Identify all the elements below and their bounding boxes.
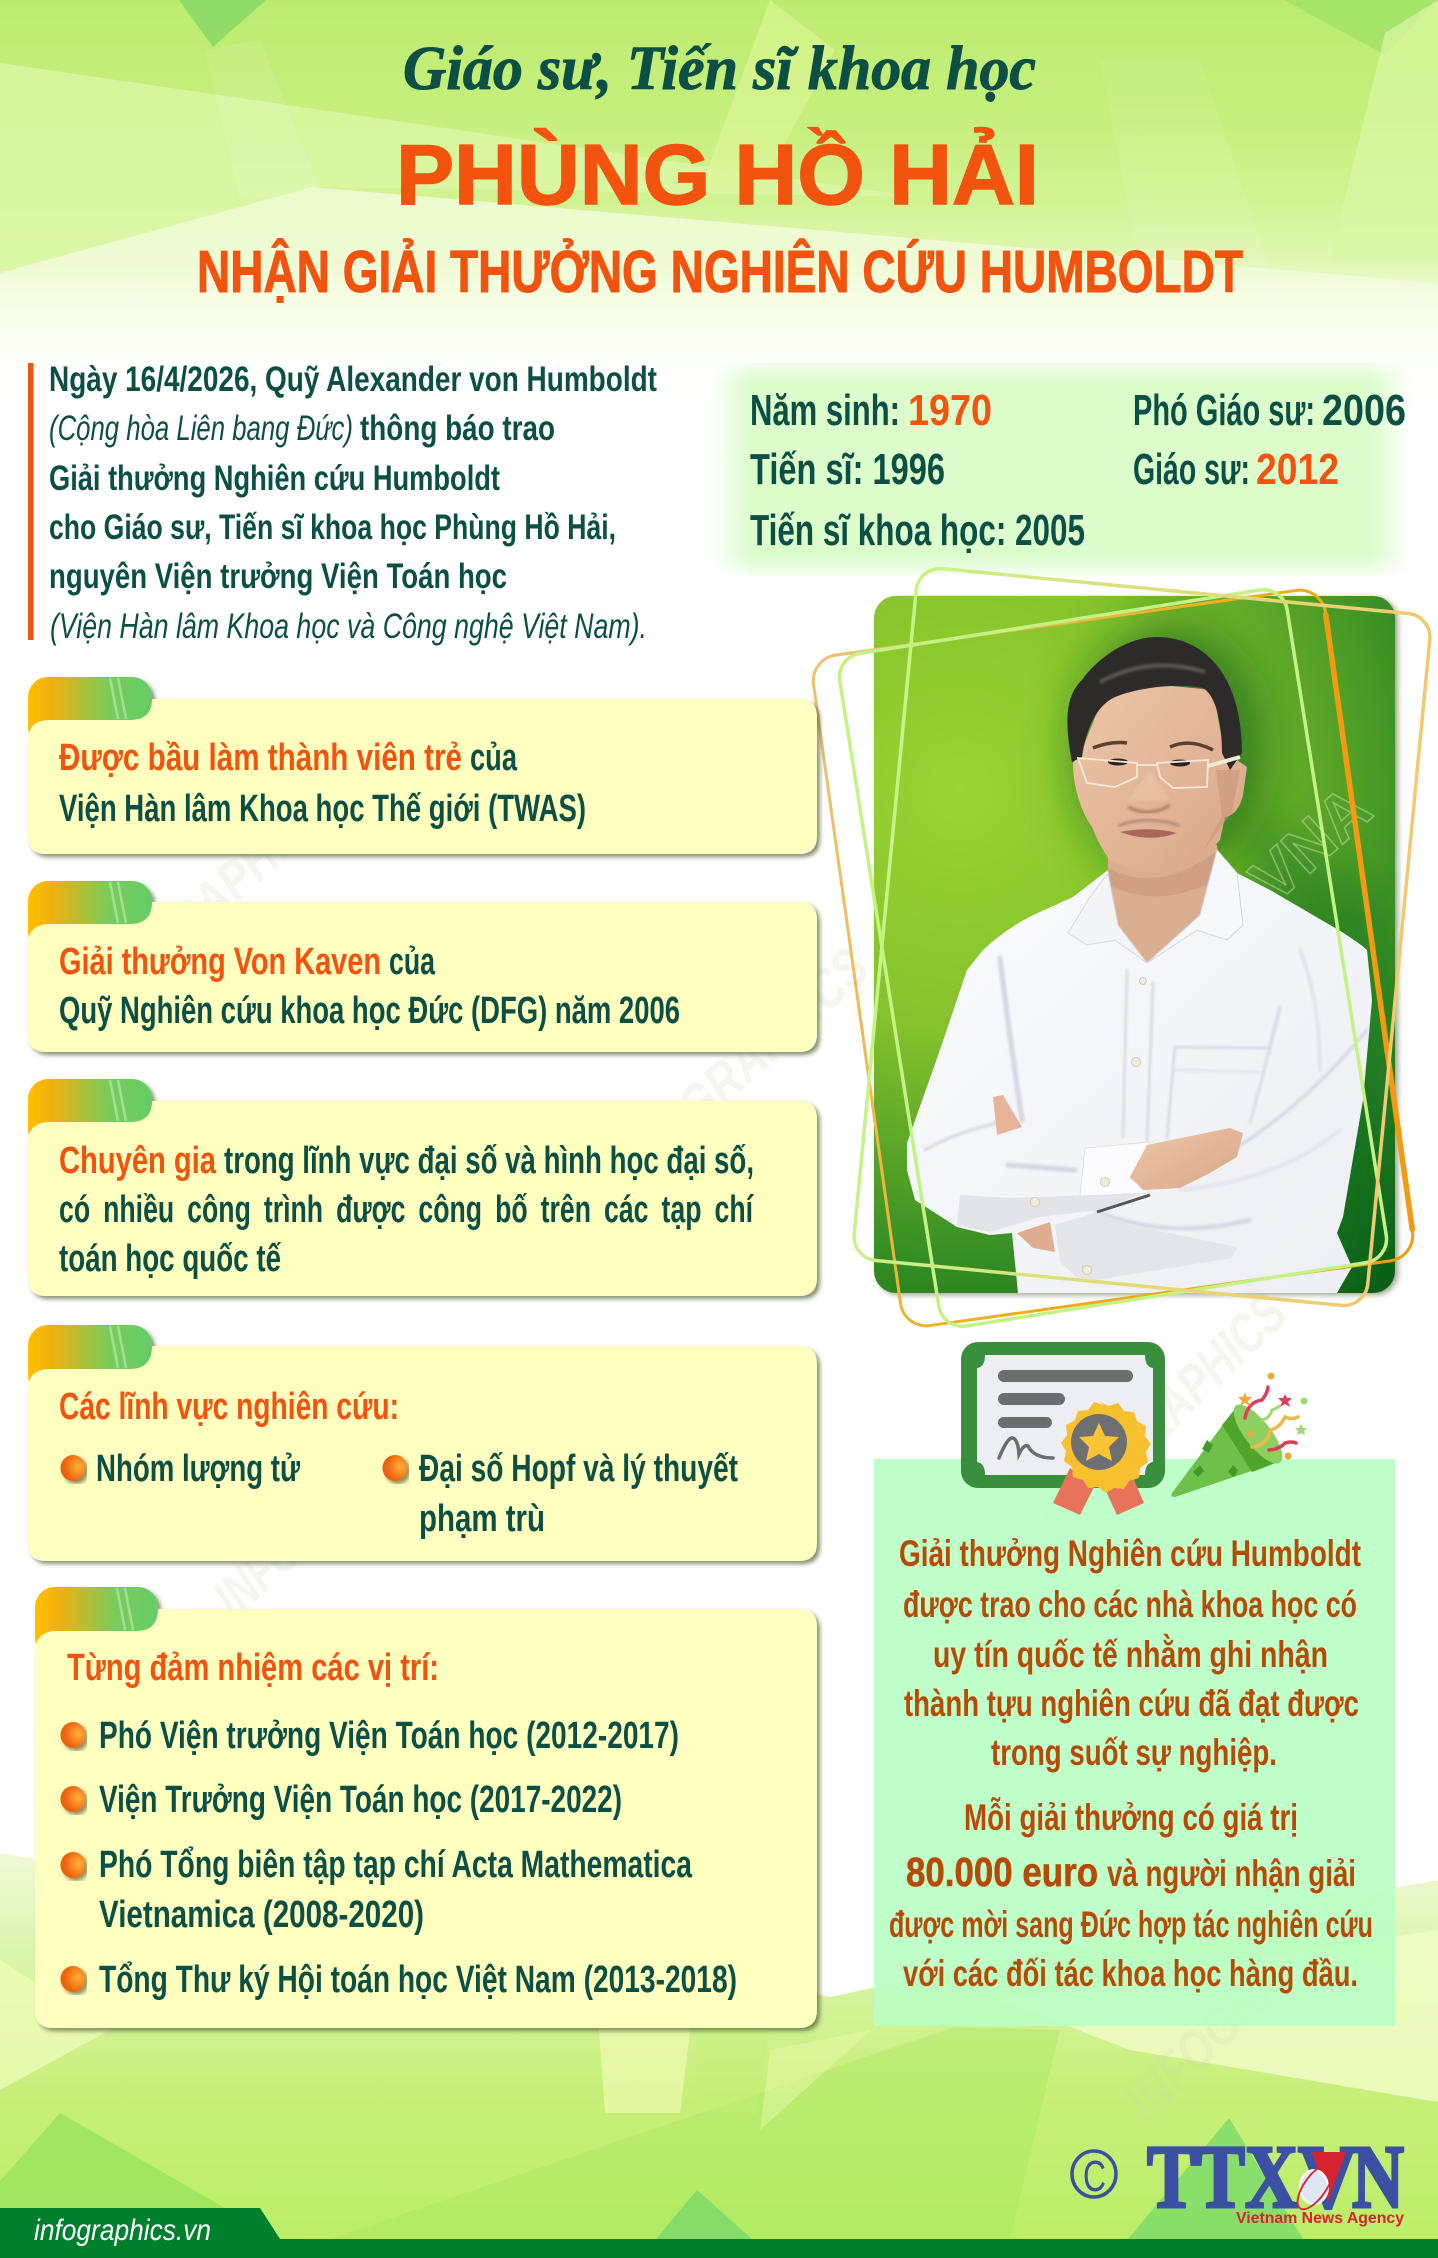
card: TWAS membership: Viện Hàn lâm Khoa học Thế giới (TWAS) — [59, 788, 586, 830]
upper hand — [993, 1095, 1022, 1135]
title line: name: PHÙNG HỒ HẢI — [396, 127, 1039, 223]
card: algebra expert: Chuyên gia — [59, 1140, 217, 1182]
info panel: milestones: 2012 — [1256, 445, 1339, 494]
card: TWAS membership — [28, 677, 817, 854]
intro paragraph: nguyên Viện trưởng Viện Toán học — [49, 557, 507, 596]
award text: Mỗi giải thưởng có giá trị — [964, 1797, 1298, 1838]
info panel: milestones — [711, 363, 1412, 575]
eyebrows — [1093, 743, 1127, 748]
title — [197, 35, 1243, 305]
card: algebra expert: có nhiều công trình được công bố trên các tạp chí — [59, 1189, 754, 1231]
forearm — [1130, 1128, 1243, 1190]
buttons — [1030, 978, 1146, 1274]
lower hand — [1017, 1222, 1055, 1252]
hair — [1067, 637, 1242, 770]
logo: TTXVN: Vietnam News Agency — [1236, 2210, 1404, 2227]
decorative frame: pale — [852, 566, 1432, 1308]
nose — [1128, 805, 1170, 812]
info panel: milestones: Giáo sư: — [1133, 445, 1250, 494]
card: algebra expert: toán học quốc tế — [59, 1238, 282, 1280]
bullet — [60, 1966, 86, 1992]
card: research fields: phạm trù — [419, 1498, 545, 1540]
green backdrop — [874, 596, 1395, 1293]
icon: party popper — [1171, 1372, 1308, 1497]
info panel: milestones: Tiến sĩ: 1996 — [750, 445, 945, 494]
footer tab: website: infographics.vn — [34, 2214, 211, 2247]
footer tab: website — [0, 2208, 280, 2258]
neck — [1108, 845, 1220, 963]
bullet — [382, 1455, 408, 1481]
decorative frame: light green — [836, 586, 1390, 1330]
award text: 80.000 euro — [906, 1849, 1098, 1895]
shadow gap — [1097, 1195, 1150, 1212]
award text: và người nhận giải — [1107, 1853, 1356, 1894]
card: Von Kaven prize: Quỹ Nghiên cứu khoa học Đức (DFG) năm 2006 — [59, 990, 680, 1032]
card: positions held — [35, 1587, 817, 2028]
mouth — [1120, 829, 1177, 838]
logo: TTXVN: TTX — [1147, 2128, 1298, 2227]
watermark — [51, 775, 1393, 2132]
logo: TTXVN: N — [1352, 2128, 1404, 2227]
accent bar — [28, 363, 34, 640]
info panel: milestones: Phó Giáo sư: — [1133, 386, 1315, 435]
head — [1073, 686, 1247, 858]
card: positions held: Phó Viện trưởng Viện Toán học (2012-2017) — [99, 1715, 679, 1757]
bullet — [60, 1722, 86, 1748]
info panel: milestones: Tiến sĩ khoa học: 2005 — [750, 506, 1085, 555]
intro paragraph: (Viện Hàn lâm Khoa học và Công nghệ Việt Nam). — [50, 607, 647, 646]
portrait illustration — [907, 625, 1400, 1293]
bullet — [60, 1852, 86, 1878]
card: research fields: Các lĩnh vực nghiên cứu: — [59, 1386, 399, 1428]
dark halo — [1075, 625, 1265, 875]
shirt shading — [925, 950, 1367, 1228]
award panel — [874, 1459, 1395, 2026]
VNA watermark: VNA — [1236, 772, 1385, 915]
eyes — [1108, 758, 1128, 766]
card: research fields — [28, 1325, 817, 1561]
icon: certificate — [961, 1342, 1165, 1515]
intro paragraph: Giải thưởng Nghiên cứu Humboldt — [49, 459, 500, 498]
ribbons — [1053, 1468, 1094, 1515]
card: TWAS membership: Được bầu làm thành viên trẻ — [59, 737, 462, 779]
watermark: INFOGRAPHICS — [51, 775, 346, 1049]
award text: uy tín quốc tế nhằm ghi nhận — [933, 1633, 1328, 1675]
card: algebra expert: trong lĩnh vực đại số và hình học đại số, — [224, 1140, 754, 1182]
card: Von Kaven prize: Giải thưởng Von Kaven — [59, 941, 381, 983]
shirt — [907, 850, 1372, 1293]
card: algebra expert — [28, 1079, 817, 1296]
card: positions held: Phó Tổng biên tập tạp chí Acta Mathematica — [99, 1844, 693, 1886]
intro paragraph: Ngày 16/4/2026, Quỹ Alexander von Humboldt — [49, 360, 657, 399]
card: TWAS membership: của — [470, 737, 518, 779]
watermark: INFOGRAPHICS — [586, 935, 881, 1209]
card: positions held: Vietnamica (2008-2020) — [99, 1894, 424, 1936]
bullet — [60, 1455, 86, 1481]
card: Von Kaven prize — [28, 881, 817, 1052]
info panel: milestones: Năm sinh: — [750, 386, 900, 435]
portrait photo panel — [810, 566, 1432, 1330]
bullet — [60, 1786, 86, 1812]
seal — [1061, 1401, 1151, 1493]
intro paragraph: cho Giáo sư, Tiến sĩ khoa học Phùng Hồ Hải, — [49, 508, 616, 547]
intro paragraph: (Cộng hòa Liên bang Đức) — [49, 409, 353, 448]
card: Von Kaven prize: của — [389, 941, 436, 983]
card: research fields: Đại số Hopf và lý thuyết — [419, 1448, 738, 1490]
card: positions held: Từng đảm nhiệm các vị trí: — [67, 1647, 439, 1689]
face shading — [1204, 770, 1240, 850]
panel background — [874, 1459, 1395, 2026]
logo: TTXVN: V — [1298, 2128, 1358, 2227]
award text — [889, 1533, 1373, 1994]
moustache — [1118, 820, 1180, 826]
card: research fields: Nhóm lượng tử — [96, 1448, 300, 1490]
intro paragraph — [28, 360, 657, 646]
info panel: milestones: 1970 — [908, 386, 992, 435]
collar — [1068, 873, 1147, 963]
award text: trong suốt sự nghiệp. — [991, 1732, 1277, 1773]
card: positions held: Viện Trưởng Viện Toán học (2017-2022) — [99, 1779, 622, 1821]
watermark: INFOGRAPHICS — [201, 1381, 466, 1629]
decorative frame: gold — [810, 587, 1416, 1329]
decorative frame: gold thick edge — [1326, 613, 1412, 1231]
intro paragraph: thông báo trao — [360, 409, 555, 448]
watermark: INFOGRAPHICS — [1025, 1281, 1299, 1549]
card: positions held: Tổng Thư ký Hội toán học Việt Nam (2013-2018) — [99, 1959, 737, 2001]
title line: academic rank: Giáo sư, Tiến sĩ khoa học — [403, 35, 1036, 103]
sleeve bands — [957, 1193, 1143, 1232]
glasses — [1078, 757, 1240, 788]
watermark: INFOGRAPHICS — [479, 1760, 767, 2042]
info panel: milestones: 2006 — [1322, 386, 1406, 435]
cuff — [1080, 1142, 1150, 1196]
logo: copyright mark: C — [1083, 2152, 1106, 2201]
